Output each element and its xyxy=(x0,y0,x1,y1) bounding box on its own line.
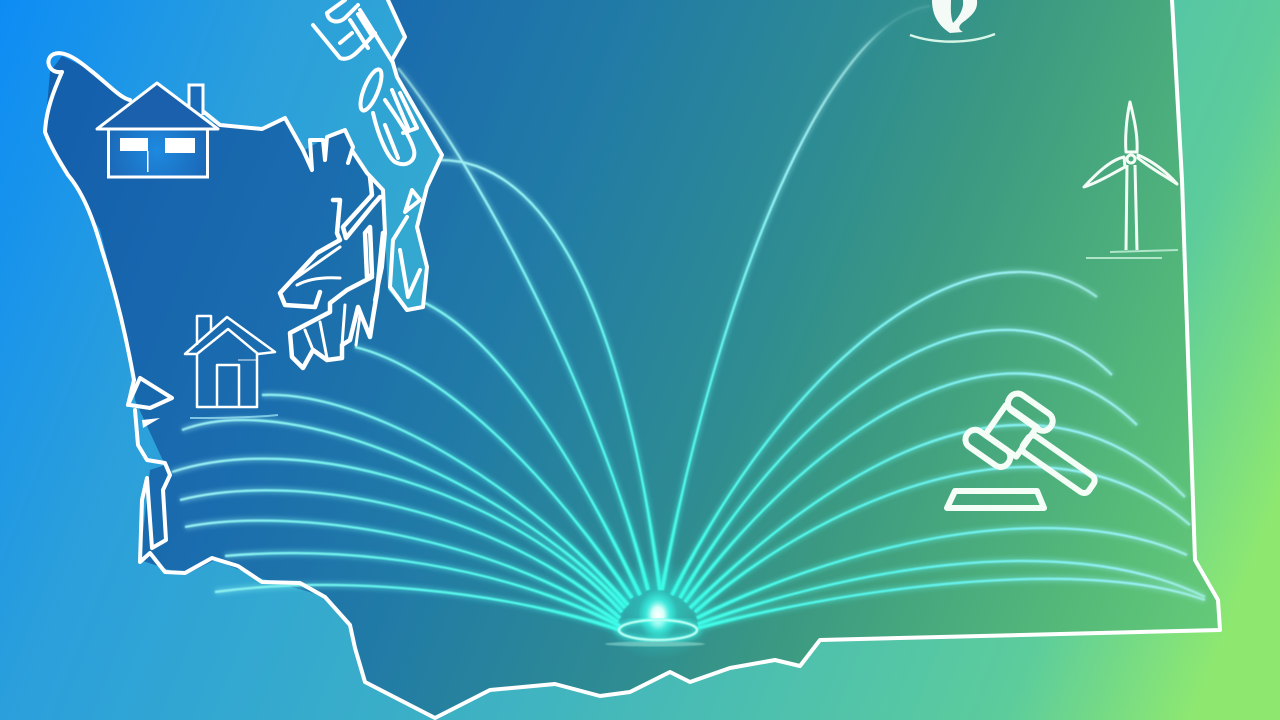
icon: small house lower left xyxy=(185,316,275,407)
gavel top cap xyxy=(1004,390,1056,434)
outer halo xyxy=(598,560,718,660)
diamond inlet xyxy=(405,190,420,212)
gavel block xyxy=(985,405,1037,457)
gavel bottom cap xyxy=(962,426,1014,470)
gavel head and handle xyxy=(962,382,1112,518)
finger divider strokes xyxy=(305,305,360,358)
glowing convergence point xyxy=(598,560,718,660)
middle petal islands xyxy=(373,90,417,164)
small house walls xyxy=(197,354,257,407)
house windows xyxy=(120,138,195,172)
hand upper finger xyxy=(280,200,340,307)
small house ground line xyxy=(190,415,278,418)
palm and fingers xyxy=(290,233,383,368)
hand-shaped peninsula xyxy=(280,177,383,368)
turbine tower xyxy=(1126,165,1137,250)
ground reflection xyxy=(605,642,705,646)
coastal marks xyxy=(142,418,160,428)
hand vertical strip xyxy=(365,227,372,277)
ray glow layer xyxy=(172,6,1205,630)
icon: gavel xyxy=(947,382,1112,518)
gavel base xyxy=(947,491,1044,508)
western and northern coast xyxy=(45,53,385,380)
small house window line xyxy=(238,359,258,361)
light ring xyxy=(619,620,697,640)
icon: plume at top xyxy=(910,0,995,42)
small house door xyxy=(217,365,239,407)
light ring glow xyxy=(618,620,698,640)
icon: house upper left xyxy=(97,83,218,177)
bright core xyxy=(638,589,678,641)
plume smoke xyxy=(932,0,977,33)
ray core layer xyxy=(172,6,1205,630)
hand inner strokes xyxy=(293,247,340,285)
middle oval island xyxy=(356,67,386,113)
ray base near the light xyxy=(172,6,1205,630)
light rays converging on the glowing point xyxy=(172,6,1205,630)
plume base arc xyxy=(910,34,995,42)
small house chimney xyxy=(197,316,211,345)
upper islands xyxy=(313,0,393,63)
turbine ground lines xyxy=(1086,250,1178,258)
small house roof xyxy=(185,317,275,354)
hand second finger xyxy=(343,177,380,238)
house body xyxy=(108,128,208,177)
coastal ridge xyxy=(388,0,442,310)
house roof xyxy=(97,83,218,129)
turbine hub xyxy=(1127,155,1135,163)
gavel handle xyxy=(1020,433,1097,495)
house chimney xyxy=(189,85,203,115)
turbine blades xyxy=(1126,102,1137,152)
petal in strait xyxy=(400,250,420,297)
icon: wind turbine xyxy=(1084,102,1178,258)
